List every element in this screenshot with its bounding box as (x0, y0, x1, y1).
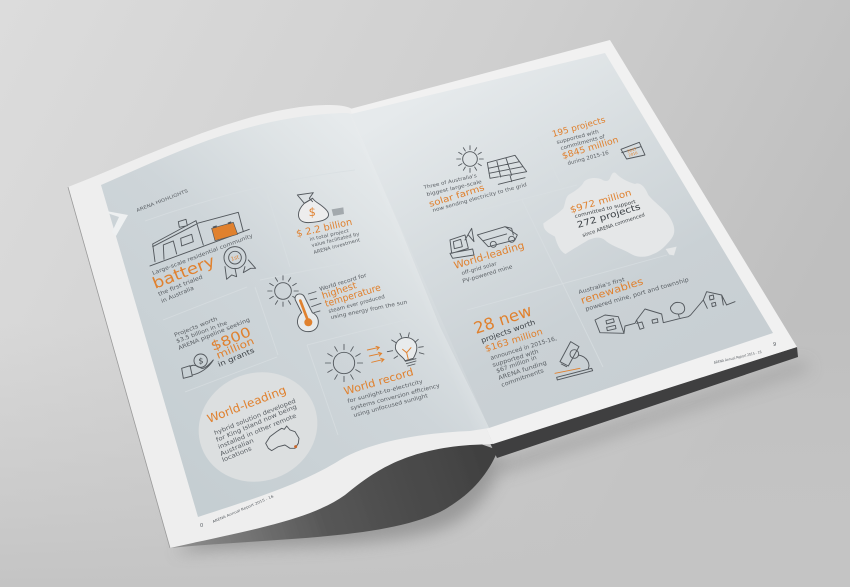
text: three: Three of Australia's (422, 173, 478, 191)
text: supported: supported with (492, 349, 540, 369)
text: battery: battery (150, 252, 218, 293)
text: since: since ARENA commenced (582, 212, 646, 239)
icon: money bag: $ (309, 205, 316, 219)
text: hybrid: hybrid solution developed (213, 398, 297, 437)
icon: Australia map (543, 173, 677, 257)
block: world-leading circle (183, 356, 333, 498)
text: 28 new: 28 new (471, 301, 534, 338)
page number left: 0 (200, 523, 203, 529)
footer right: ARENA Annual Report 2015 - 16 (713, 350, 763, 365)
text: world record: World record (342, 366, 415, 398)
icon: solar panel (487, 155, 527, 184)
icon: sun (325, 344, 363, 382)
text: during: during 2015-16 (567, 150, 610, 167)
page edge line (68, 187, 170, 548)
text: world-leading: World-leading (205, 383, 288, 426)
text: pipeline: ARENA pipeline seeking (177, 317, 252, 352)
text: 195 projects: 195 projects (551, 115, 607, 140)
text: commitments of: commitments of (560, 134, 606, 152)
text: 800: $800 (209, 324, 253, 355)
icon: calendar (621, 142, 645, 159)
block: battery (150, 212, 256, 305)
text: for King Island: for King Island now being (215, 403, 298, 444)
page number right: 9 (773, 342, 776, 348)
icon: light bulb (387, 333, 424, 366)
text: 67 million: $67 million in (496, 355, 538, 375)
panel: left page content (136, 188, 441, 529)
spine highlight (330, 114, 489, 431)
icon: calendar: 2016 (628, 151, 639, 158)
cast shadow under brochure (175, 362, 812, 552)
text: now sending: now sending electricity to the grid (432, 182, 527, 214)
text: ARENA funding: ARENA funding (498, 360, 548, 382)
text: Australia's first: Australia's first (578, 277, 626, 296)
text: sunlight: for sunlight-to-electricity (347, 379, 424, 405)
icon: first rosette: 1st (230, 255, 240, 263)
block: 800 million (174, 316, 256, 378)
icon: township line drawing (595, 292, 735, 333)
icon: sun (268, 276, 298, 306)
panel: right page content (422, 115, 776, 389)
text: world record for: World record for (319, 273, 368, 293)
block: 28 new (471, 301, 593, 389)
icon: calendar: 2015 (627, 147, 637, 154)
text: highest: highest (321, 280, 358, 302)
text: announced: announced in 2015-16, (490, 336, 558, 362)
text: Australian: Australian (219, 437, 255, 458)
page curl shadow (170, 430, 498, 548)
text: off-grid: off-grid solar (461, 261, 498, 277)
text: world-leading: World-leading (453, 240, 526, 272)
text: 972 million: $972 million (569, 188, 633, 216)
text: large-scale: Large-scale residential community (152, 233, 255, 277)
text: temperature: temperature (324, 282, 382, 310)
chevron marker (106, 211, 128, 236)
text: value facilitated: value facilitated by (311, 231, 360, 249)
right page panel (351, 53, 773, 428)
text: million: million (215, 336, 256, 362)
block: world-leading mine (450, 227, 526, 285)
text: ARENA investment: ARENA investment (313, 237, 361, 256)
text: unfocused: using unfocused sunlight (353, 393, 430, 419)
block: 195 projects (551, 115, 645, 167)
icon: hand with coin: $ (198, 357, 203, 366)
footer left: ARENA Annual Report 2015 - 16 (212, 494, 275, 524)
block: solar farms (422, 146, 527, 214)
text: first trialed: the first trialed (158, 274, 204, 298)
text: supported with: supported with (556, 129, 599, 146)
text: locations: locations (221, 445, 253, 464)
right page sheet (350, 40, 797, 444)
page thickness (490, 347, 798, 458)
text: in grants: in grants (216, 345, 256, 369)
icon: orange arrows (367, 346, 384, 362)
text: 272 projects: 272 projects (576, 202, 642, 231)
text: systems: systems conversion efficiency (350, 383, 441, 412)
icon: sun (457, 146, 483, 172)
text: steam: steam ever produced (328, 294, 386, 315)
text: installed: installed in other remote (217, 412, 298, 451)
text: 845 million: $845 million (561, 135, 620, 162)
text: projects worth: projects worth (480, 317, 536, 345)
icon: Australia outline (266, 426, 299, 451)
text: using energy: using energy from the sun (330, 300, 408, 321)
text: 3.5 billion: $3.5 billion in the (176, 320, 229, 345)
text: committed: committed to support (574, 199, 636, 220)
heading: ARENA highlights: ARENA HIGHLIGHTS (136, 188, 189, 214)
text: biggest: biggest large-scale (426, 179, 482, 198)
left page panel (101, 113, 489, 517)
block: highest temperature (268, 273, 408, 332)
text: projects worth: Projects worth (174, 316, 219, 339)
block: 2.2 billion (295, 193, 361, 256)
text: in Australia: in Australia (160, 286, 195, 305)
text: in total project: in total project (309, 228, 350, 243)
text: commitments: commitments (501, 368, 545, 389)
text: renewables: renewables (580, 276, 645, 307)
text: powered mine: powered mine, port and township (585, 277, 690, 313)
icon: thermometer (295, 292, 321, 332)
block: map with 972 million (543, 173, 677, 257)
icon: house with battery (150, 212, 249, 266)
left page sheet (68, 105, 493, 548)
text: solar farms: solar farms (428, 183, 486, 210)
text: 2.2 billion: $ 2.2 billion (295, 217, 353, 240)
icon: excavator and truck (450, 227, 517, 258)
icon: microscope (555, 342, 593, 380)
block: renewables (578, 276, 735, 333)
text: 163 million: $163 million (484, 327, 544, 355)
callout circle (183, 356, 333, 498)
block: world record (325, 333, 441, 419)
text: PV-powered: PV-powered mine (462, 264, 514, 285)
